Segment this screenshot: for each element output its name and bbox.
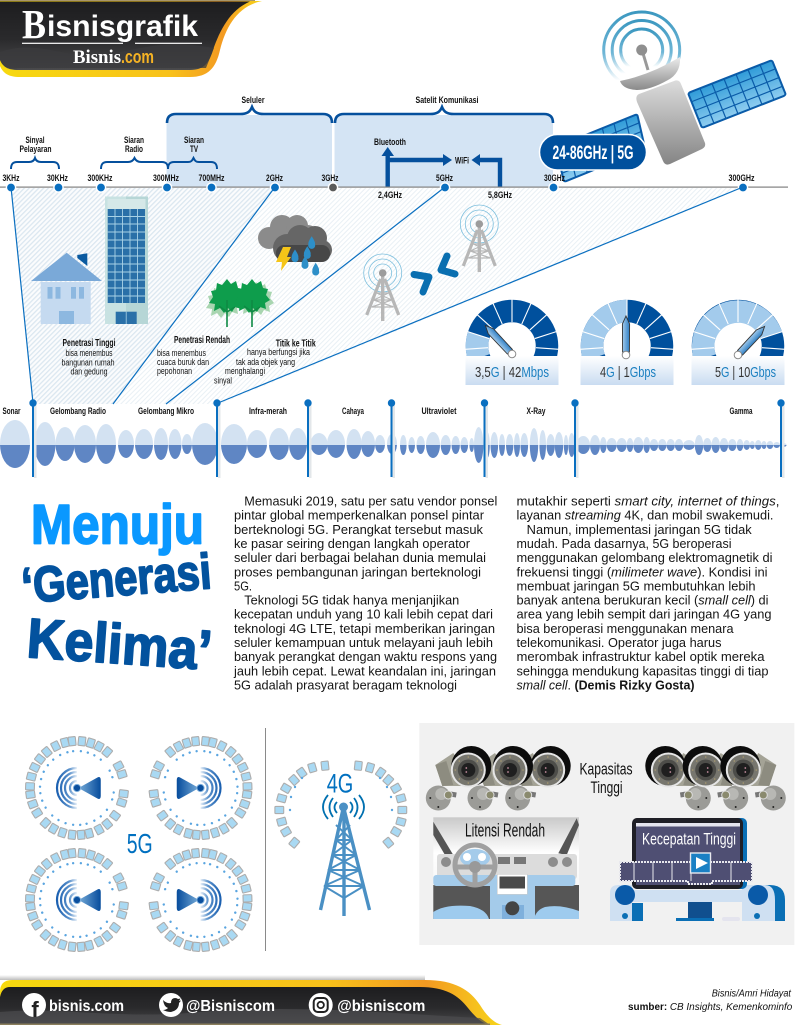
text: Penetrasi Tinggi: Penetrasi Tinggi — [62, 338, 116, 349]
article column 1 — [233, 494, 497, 692]
article column 1: proses pembangunan jaringan berteknologi — [234, 564, 481, 579]
spectrum markers — [29, 399, 785, 478]
text: Penetrasi Tinggi — [62, 338, 116, 376]
text: Penetrasi Rendah: cuaca buruk dan — [157, 357, 209, 367]
band: Satelit Komunikasi: Satelit Komunikasi — [416, 95, 478, 106]
icon: signal chevrons — [414, 256, 455, 292]
icon: house — [31, 253, 102, 324]
text: @bisniscom: @bisniscom — [337, 998, 425, 1015]
axis labels: 2,4GHz — [378, 190, 402, 200]
bracket: Siaran TV — [168, 135, 217, 169]
article column 1: seluler kemampuan untuk melayani jauh lebih — [234, 635, 493, 650]
article column 2: layanan streaming 4K, dan mobil swakemudi. — [516, 508, 774, 523]
text: bisnis.com: bisnis.com — [49, 998, 124, 1015]
article column 1: seluler dari berbagai belahan dunia memulai — [234, 550, 486, 565]
spectrum labels: Infra-merah — [249, 406, 287, 417]
title — [19, 492, 214, 682]
label: Kapasitas Tinggi — [580, 759, 632, 797]
icon: instagram — [309, 993, 333, 1017]
gauge: 3,5G 42Mbps: 3,5G | 42Mbps — [475, 364, 549, 381]
article column 2 — [516, 494, 780, 692]
article column 2: mudah. Pada dasarnya, 5G beroperasi — [516, 536, 732, 551]
spectrum labels: X-Ray — [526, 406, 546, 417]
spectrum labels: Gamma — [730, 406, 753, 417]
spectrum labels: Gelombang Mikro — [138, 406, 194, 417]
title: Kelima’ — [25, 606, 214, 682]
icon: office building — [105, 196, 148, 324]
text: Penetrasi Rendah: Penetrasi Rendah — [174, 335, 230, 346]
axis labels: 300MHz — [153, 173, 179, 183]
text: Penetrasi Tinggi: dan gedung — [70, 366, 108, 376]
article column 1: pintar global memperkenalkan ponsel pintar — [234, 508, 485, 523]
satellite — [556, 12, 786, 182]
diagram: 5G small cells: 5G — [127, 828, 153, 859]
callout: 24-86GHz 5G — [540, 134, 646, 170]
coverage fan hatch — [11, 188, 743, 404]
diagram: 4G tower: 4G — [327, 769, 353, 799]
text: @Bisniscom: @Bisniscom — [186, 998, 275, 1015]
gauge: 5G 10Gbps — [691, 299, 785, 385]
text: Titik ke Titik: tak ada objek yang — [236, 357, 295, 367]
header banner — [0, 0, 262, 77]
gauge: 5G 10Gbps: 5G | 10Gbps — [715, 364, 776, 381]
credits — [628, 989, 793, 1013]
spectrum labels: Sonar — [2, 406, 21, 417]
icon: facebook — [22, 993, 46, 1022]
text: Titik ke Titik: menghalangi — [225, 366, 265, 376]
label: Kapasitas Tinggi: Kapasitas — [580, 759, 632, 778]
text: Penetrasi Tinggi: bisa menembus — [66, 348, 113, 358]
article column 2: membuat jaringan 5G membutuhkan lebih — [516, 578, 756, 593]
gauge: 3,5G 42Mbps — [465, 299, 559, 385]
article column 1: Teknologi 5G tidak hanya menjanjikan — [244, 593, 459, 608]
article column 1: berteknologi 5G. Perangkat tersebut masuk — [234, 522, 484, 537]
article column 1: kecepatan unduh yang 10 kali lebih cepat dari — [234, 607, 493, 622]
axis labels: 5GHz — [436, 173, 453, 183]
text: Titik ke Titik: hanya berfungsi jika — [247, 347, 310, 357]
axis labels: 2GHz — [266, 173, 283, 183]
footer banner — [0, 975, 502, 1025]
bracket: Siaran TV: Siaran — [184, 135, 204, 146]
axis labels: 300KHz — [88, 173, 113, 183]
article column 2: sehingga mendukung kapasitas tinggi di tiap — [516, 663, 768, 678]
text: Titik ke Titik: sinyal — [214, 376, 232, 386]
text: Penetrasi Rendah: pepohonan — [157, 366, 192, 376]
article column 1: 5G. — [234, 578, 252, 593]
axis labels: 30GHz — [544, 173, 565, 183]
panel: benefits — [419, 723, 794, 945]
text: Penetrasi Rendah: bisa menembus — [157, 348, 206, 358]
band: Satelit Komunikasi — [334, 95, 553, 187]
band: Seluler — [166, 95, 332, 187]
title: ‘Generasi — [19, 543, 213, 614]
article column 2: frekuensi tinggi (milimeter wave). Kondisi ini — [516, 564, 768, 579]
spectrum labels — [2, 406, 753, 417]
axis labels: 3KHz — [2, 173, 20, 183]
article column 2: menggunakan gelombang elektromagnetik di — [516, 550, 772, 565]
text: Penetrasi Tinggi: bangunan rumah — [62, 358, 114, 368]
article column 2: merombak infrastruktur kabel optik mereka — [516, 649, 765, 664]
text: Titik ke Titik — [214, 338, 316, 386]
article column 1: teknologi 4G LTE, tetapi memberikan jaringan — [234, 621, 495, 636]
icon: trees — [206, 279, 274, 327]
article column 2: telekomunikasi. Operator juga harus — [516, 635, 722, 650]
label: Kapasitas Tinggi: Tinggi — [590, 778, 622, 797]
bracket: Sinyal Pelayaran: Sinyal — [26, 135, 44, 146]
article column 1: banyak perangkat dengan waktu respons yang — [234, 649, 497, 664]
illustration: monitor, Kecepatan Tinggi — [610, 818, 785, 921]
article column 1: Memasuki 2019, satu per satu vendor ponsel — [244, 494, 497, 508]
article column 1: ke pasar seiring dengan langkah operator — [234, 536, 471, 551]
axis labels: 300GHz — [728, 173, 755, 183]
axis labels: 700MHz — [198, 173, 225, 183]
axis labels — [2, 173, 755, 200]
diagram: 4G tower — [275, 761, 407, 916]
illustration: monitor, Kecepatan Tinggi: Kecepatan Tinggi — [642, 829, 736, 848]
icon: storm cloud — [258, 215, 332, 275]
band: Seluler: Seluler — [242, 95, 265, 106]
logo: Bisnisgrafik: Bisnis — [73, 47, 121, 68]
signal rings — [604, 12, 680, 88]
diagram: 5G small cells — [26, 737, 252, 952]
article column 2: banyak antena berukuran kecil (small cell) di — [516, 593, 768, 608]
article column 2: area yang lebih sempit dari jaringan 4G yang — [516, 607, 772, 622]
article column 2: small cell. (Demis Rizky Gosta) — [516, 678, 694, 692]
logo: Bisnisgrafik: B — [22, 1, 46, 47]
gauge: 4G 1Gbps: 4G | 1Gbps — [600, 364, 656, 381]
arrows: Bluetooth and WiFi — [374, 137, 500, 187]
article column 2: Namun, implementasi jaringan 5G tidak — [527, 522, 752, 537]
bracket: Siaran Radio: Siaran — [124, 135, 144, 146]
logo: Bisnisgrafik: .com — [121, 47, 154, 67]
axis labels: 3GHz — [322, 173, 339, 183]
illustration: car interior, Litensi Rendah: Litensi Rendah — [465, 821, 545, 841]
icon: right tower — [460, 205, 498, 272]
frequency axis — [0, 173, 788, 200]
credits: Bisnis/Amri Hidayat — [712, 989, 792, 1000]
article column 1: jauh lebih cepat. Lewat keandalan ini, jaringan — [233, 663, 496, 678]
axis labels: 30KHz — [47, 173, 68, 183]
logo: Bisnisgrafik — [22, 1, 202, 68]
spectrum labels: Ultraviolet — [422, 406, 457, 417]
arrows: Bluetooth and WiFi: WiFi — [455, 156, 469, 166]
cameras: right group — [645, 746, 786, 810]
article column 2: mutakhir seperti smart city, internet of things , — [516, 494, 780, 508]
cameras: left group — [426, 746, 571, 810]
gauge: 4G 1Gbps — [580, 299, 674, 385]
bracket: Sinyal Pelayaran — [11, 135, 59, 169]
axis labels: 5,8GHz — [488, 190, 512, 200]
article column 1: 5G adalah prasyarat beragam teknologi — [234, 678, 457, 692]
text: Penetrasi Rendah — [157, 335, 230, 376]
illustration: car interior, Litensi Rendah — [433, 817, 579, 919]
bracket: Siaran TV: TV — [190, 144, 198, 155]
spectrum labels: Cahaya — [342, 406, 364, 417]
title: Menuju — [31, 492, 204, 556]
bracket: Sinyal Pelayaran: Pelayaran — [20, 144, 52, 155]
credits: sumber: CB Insights, Kemenkominfo — [628, 1002, 793, 1013]
icon: facebook: f — [31, 997, 39, 1022]
article column 2: bisa beroperasi menggunakan menara — [516, 621, 734, 636]
fan dividing lines — [11, 187, 743, 404]
text: Titik ke Titik: Titik ke Titik — [276, 338, 316, 350]
icon: left tower — [364, 254, 402, 321]
arrows: Bluetooth and WiFi: Bluetooth — [374, 137, 406, 148]
bracket: Siaran Radio — [101, 135, 168, 169]
waveform spectrum — [0, 420, 787, 468]
callout: 24-86GHz 5G: 24-86GHz | 5G — [552, 143, 634, 164]
logo: Bisnisgrafik: isnisgrafik — [47, 10, 198, 43]
bracket: Siaran Radio: Radio — [125, 144, 143, 155]
spectrum labels: Gelombang Radio — [50, 406, 106, 417]
icon: twitter — [159, 993, 183, 1017]
